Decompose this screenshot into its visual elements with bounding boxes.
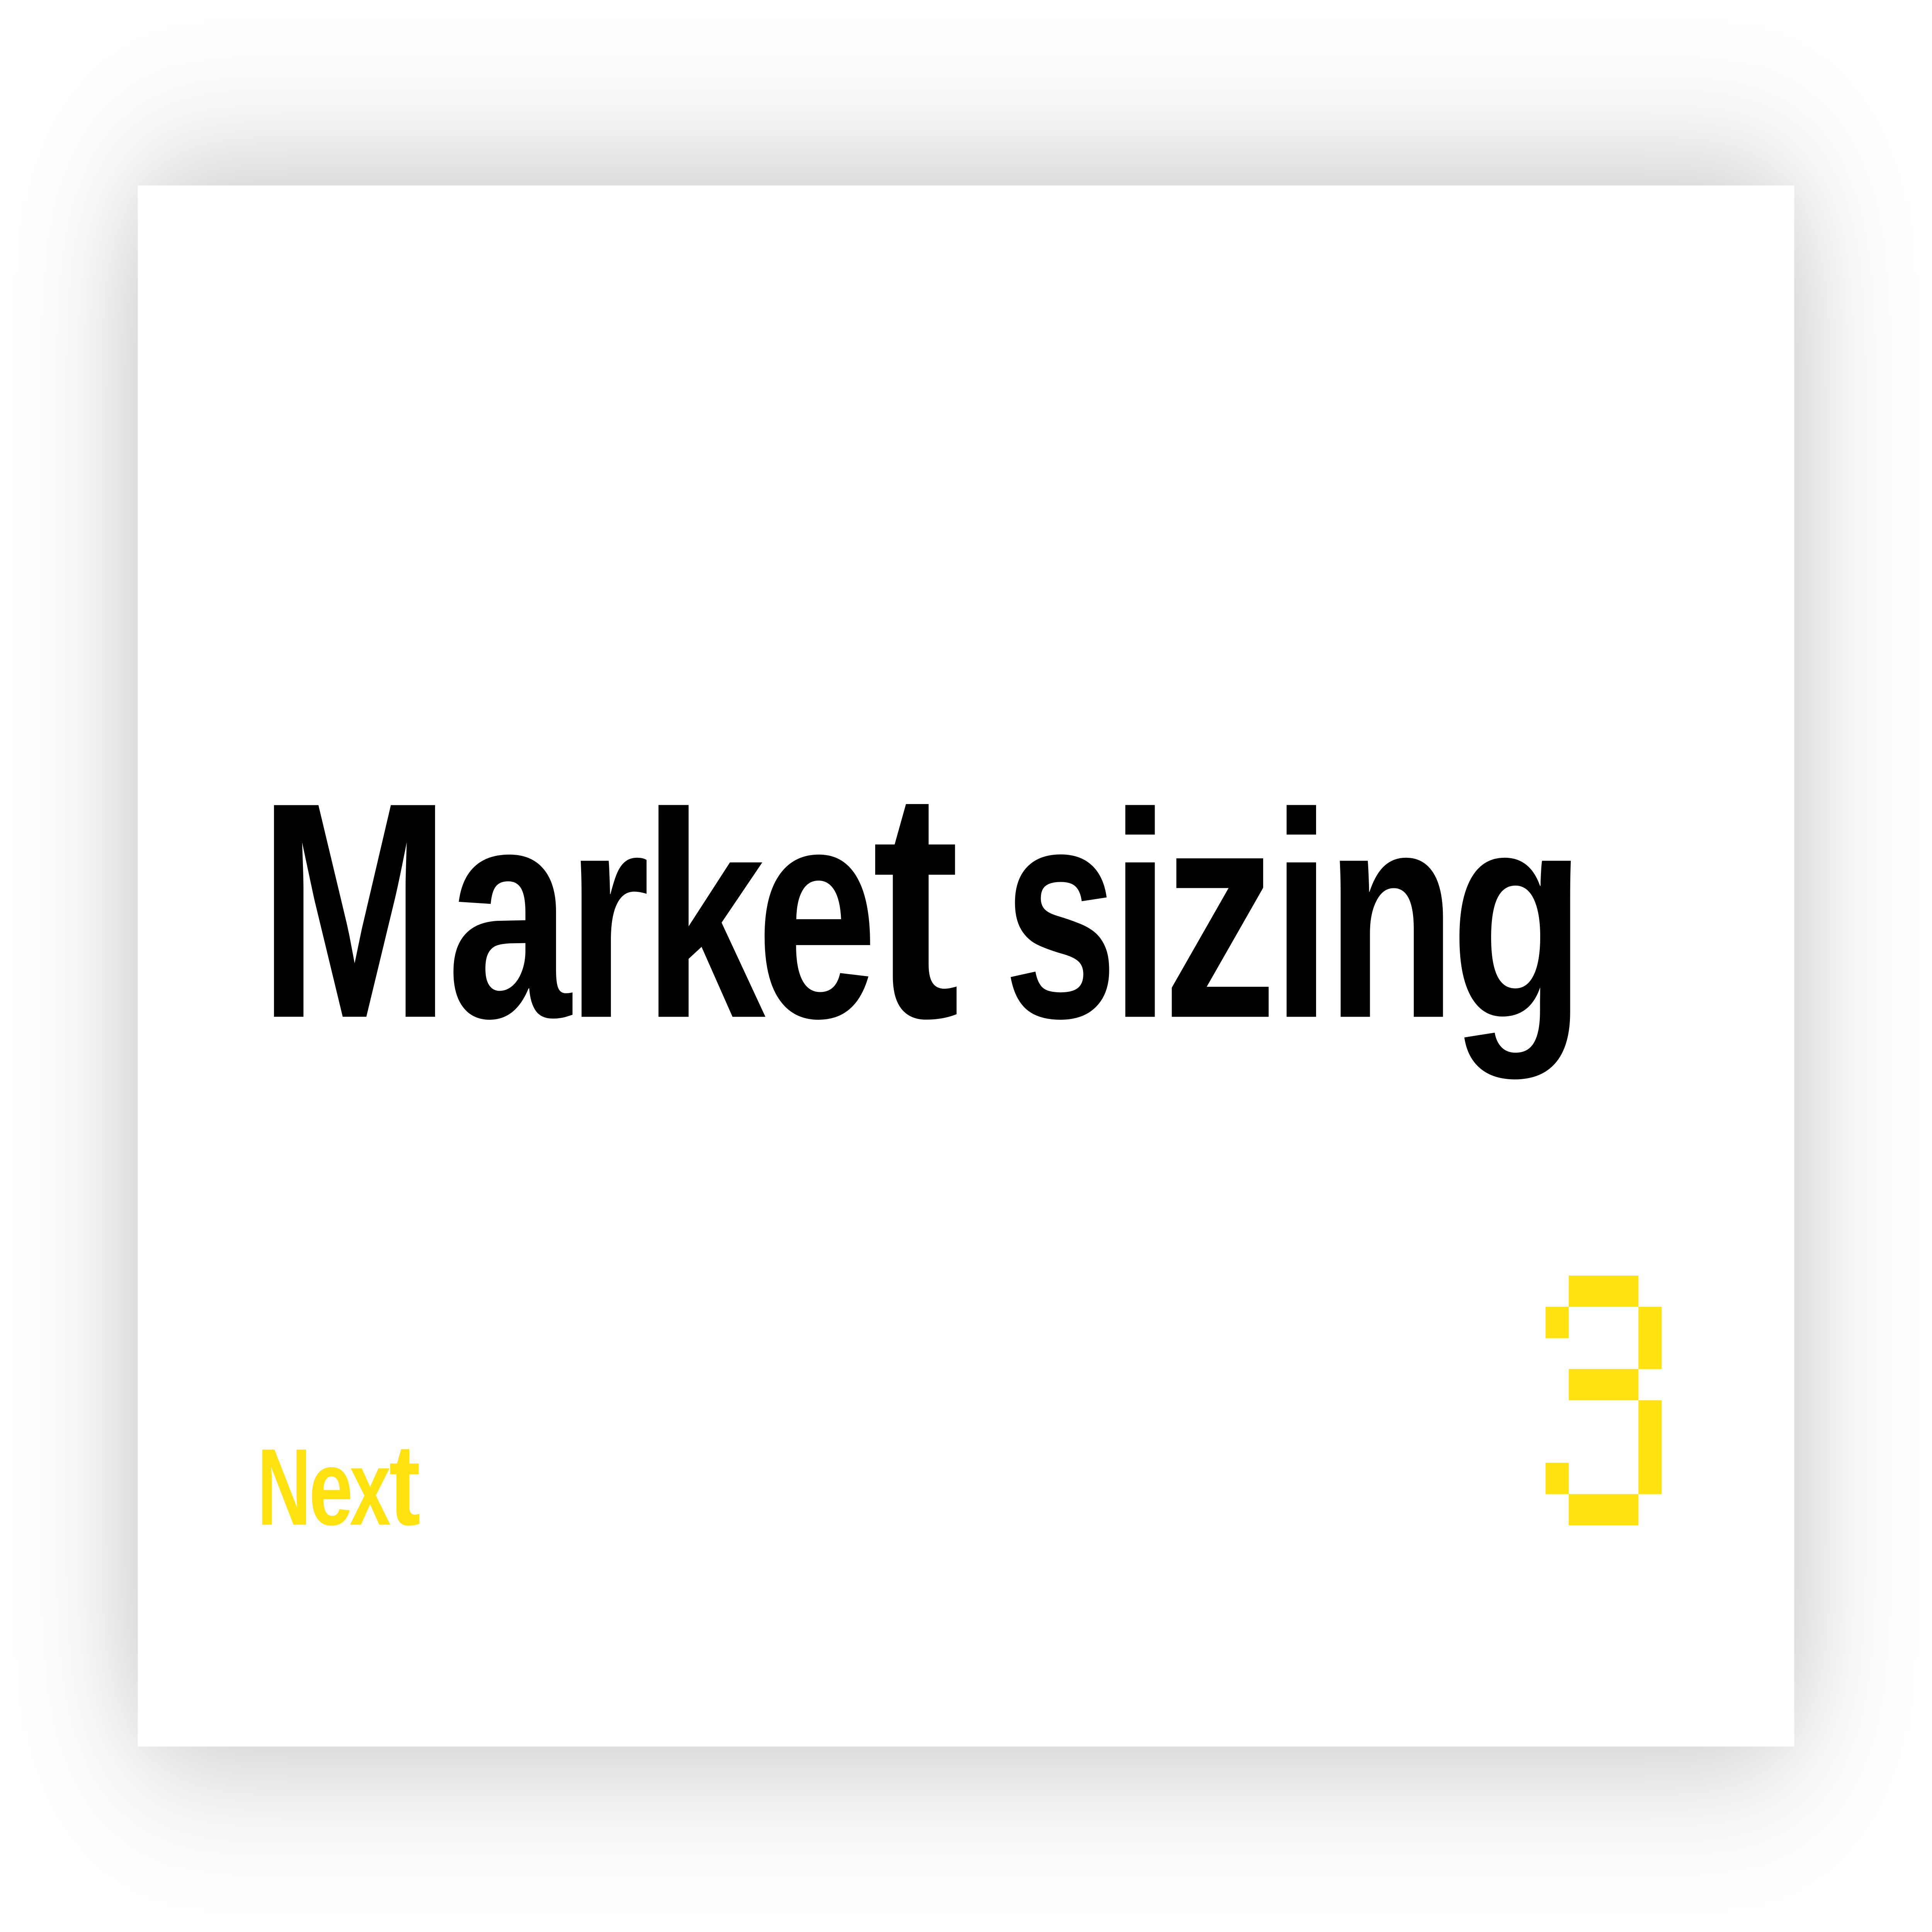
- title: Market sizing: a: [447, 744, 571, 1081]
- title: Market sizing: n: [1326, 750, 1456, 1080]
- icon: yellow pixel numeral 3: [1546, 1276, 1662, 1526]
- title: Market sizing: g: [1451, 750, 1586, 1080]
- label: Next: N: [257, 1426, 311, 1548]
- title: Market sizing: i: [1111, 752, 1170, 1079]
- label: Next: [260, 1446, 421, 1529]
- title: Market sizing: t: [872, 722, 960, 1086]
- label: Next: x: [350, 1428, 391, 1547]
- title: Market sizing: s: [1003, 744, 1117, 1081]
- title: Market sizing: z: [1163, 745, 1277, 1081]
- title: Market sizing: [273, 802, 1570, 1079]
- title: Market sizing: i: [1272, 752, 1331, 1079]
- title: Market sizing: e: [756, 744, 878, 1081]
- title: Market sizing: k: [643, 752, 765, 1079]
- label: Next: t: [389, 1420, 420, 1549]
- label: Next: e: [309, 1428, 353, 1547]
- panel: white slide card: [138, 185, 1794, 1747]
- title: Market sizing: M: [259, 738, 451, 1082]
- title: Market sizing: r: [566, 750, 650, 1080]
